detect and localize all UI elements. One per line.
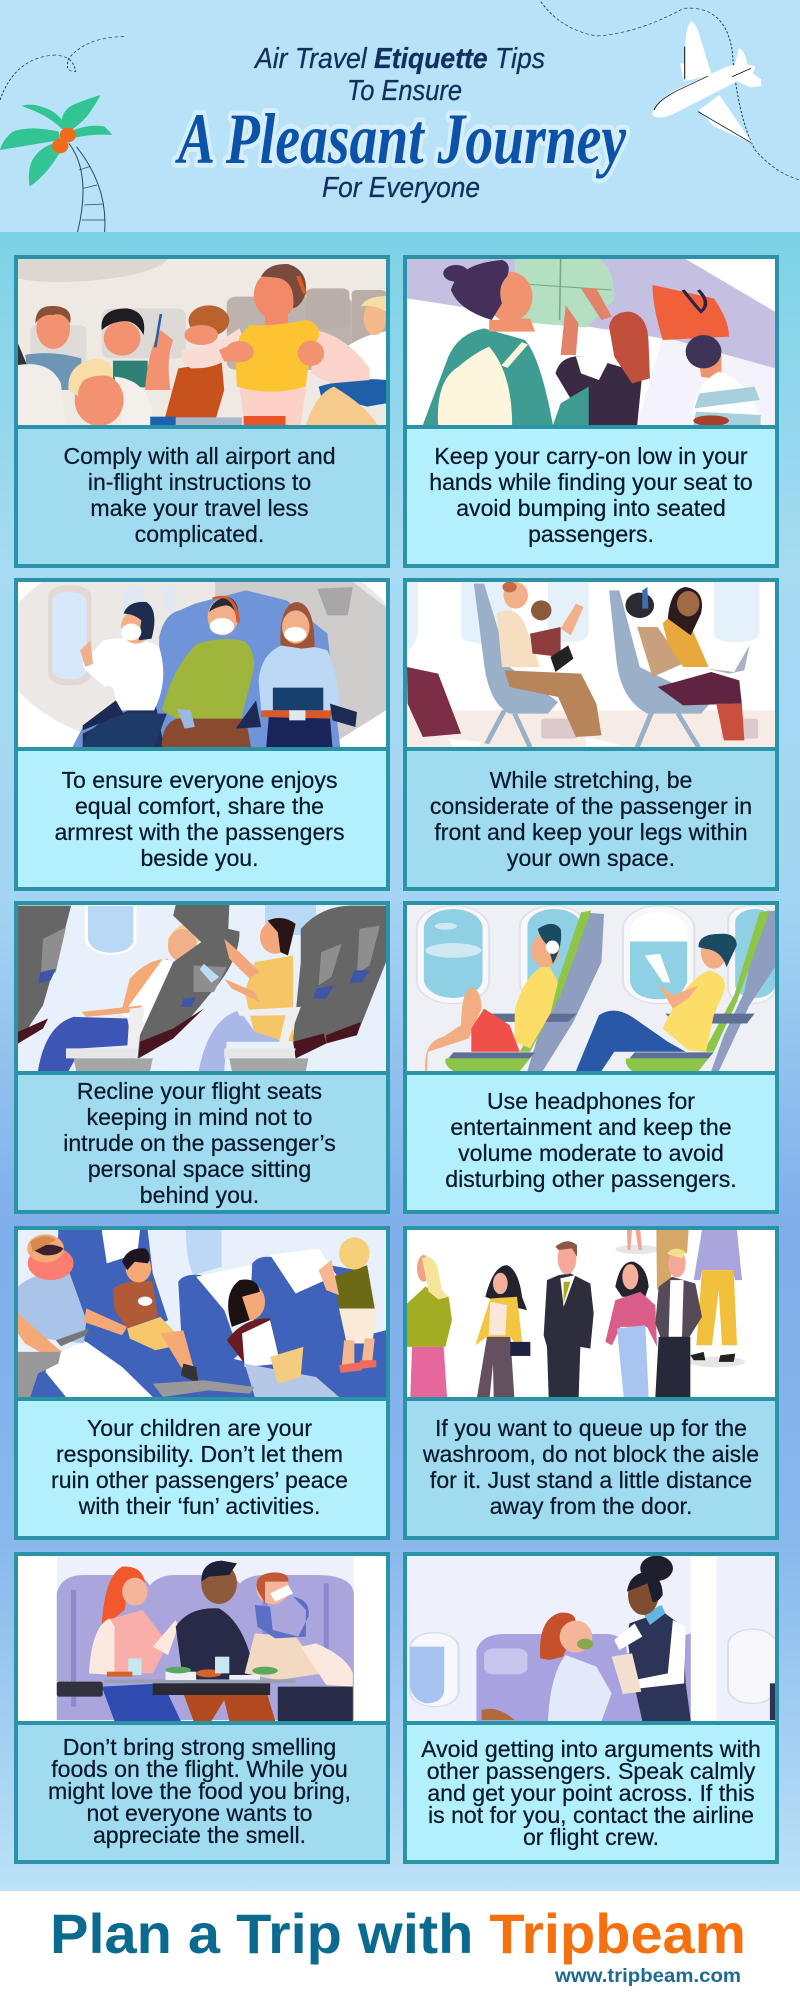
panel: headphones [403, 901, 779, 1214]
man in black suit [544, 1241, 594, 1397]
text: tip 2: passengers. [528, 521, 654, 547]
text: tip 10: other passengers. Speak calmly [427, 1758, 755, 1784]
overhead bag [653, 285, 729, 340]
text: tip 5: personal space sitting [88, 1156, 311, 1182]
panel: stretching [403, 578, 779, 891]
text: tip 10: or flight crew. [523, 1824, 659, 1850]
panel: strong foods [14, 1552, 390, 1864]
text: tip 5 [18, 1075, 386, 1210]
text: tip 4: front and keep your legs within [434, 819, 748, 845]
flight attendant [612, 1556, 691, 1721]
text: tip 8: for it. Just stand a little distance [430, 1467, 752, 1493]
woman with backpack [423, 260, 553, 425]
text: tip 8 [407, 1401, 775, 1536]
illustration: three masked passengers [18, 582, 386, 747]
seats [56, 1230, 386, 1397]
text: tip 9: foods on the flight. While you [51, 1756, 348, 1782]
woman with orange hair [89, 1567, 181, 1721]
text: tip 7: Your children are your [87, 1415, 312, 1441]
text: tip 7 [18, 1401, 386, 1536]
text: tip 9: not everyone wants to [87, 1800, 312, 1826]
passenger: woman with phone [101, 308, 173, 390]
text: tip 6: disturbing other passengers. [445, 1166, 737, 1192]
panel: children [14, 1226, 390, 1540]
woman with neck pillow [245, 1572, 353, 1721]
dashed flight path left [0, 37, 125, 100]
illustration: three passengers eating [18, 1556, 386, 1721]
passenger reading [576, 934, 737, 1071]
right seats [224, 906, 386, 1071]
text: tip 1: Comply with all airport and [63, 443, 336, 469]
title block [171, 43, 630, 204]
purple seat [476, 1633, 691, 1721]
text: tip 5: intrude on the passenger’s [63, 1130, 336, 1156]
woman with yellow jacket [475, 1265, 530, 1397]
text: tip 10 [407, 1725, 775, 1860]
illustration: flight attendant demonstrating life vest [18, 259, 386, 425]
text: tip 3: beside you. [140, 845, 259, 871]
icon: palm tree [0, 95, 112, 232]
seated woman [540, 1613, 612, 1721]
text: tip 7: responsibility. Don’t let them [56, 1441, 343, 1467]
text: tip 4: While stretching, be [490, 767, 692, 793]
man in striped shirt [686, 335, 762, 426]
footer text [50, 1902, 746, 1987]
text: tip 6 [407, 1075, 775, 1210]
text: tip 2 [407, 429, 775, 564]
background people [615, 1230, 745, 1367]
panel: arguments [403, 1552, 779, 1864]
woman with book [153, 1279, 339, 1397]
text: tip 4 [407, 751, 775, 887]
tray table and food [57, 1657, 296, 1697]
text: tip 2: hands while finding your seat to [429, 469, 753, 495]
reclined seat [66, 905, 240, 1071]
text: tip 9: Don’t bring strong smelling [63, 1734, 336, 1760]
right seat [609, 590, 711, 714]
text: tip 1 [18, 429, 386, 564]
woman with red hair [553, 288, 650, 425]
passenger with child [497, 582, 622, 747]
icon: airplane [652, 22, 761, 143]
panel: recline seats [14, 901, 390, 1214]
left seat [474, 584, 558, 714]
dashed flight path right [541, 2, 800, 180]
main title: A Pleasant Journey: A Pleasant Journey [175, 99, 627, 179]
windows [417, 906, 775, 1004]
text: tip 7: with their ‘fun’ activities. [79, 1493, 320, 1519]
man in white tank [38, 922, 201, 1071]
passenger: blond boy [68, 358, 153, 426]
text: tip 3: To ensure everyone enjoys [61, 767, 338, 793]
man in dark sweater [176, 1561, 275, 1721]
text: tip 10: is not for you, contact the airline [428, 1802, 754, 1828]
flight attendant with yellow vest [219, 264, 370, 425]
text: tip 3: armrest with the passengers [54, 819, 345, 845]
passenger: child with neck pillow [150, 305, 245, 425]
text: tip 5: Recline your flight seats [77, 1078, 322, 1104]
passenger by window [80, 602, 167, 747]
windows [410, 1629, 777, 1707]
toddler standing [319, 1237, 377, 1373]
text: tip 10: and get your point across. If this [427, 1780, 755, 1806]
passenger: man at right [285, 296, 386, 425]
text: tip 1: complicated. [135, 521, 264, 547]
woman in yellow [199, 918, 296, 1071]
panel: comply with instructions [14, 255, 390, 568]
title line: For Everyone: For Everyone [322, 172, 480, 204]
text: tip 8: away from the door. [490, 1493, 692, 1519]
website url: www.tripbeam.com [554, 1966, 741, 1987]
text: tip 3: equal comfort, share the [75, 793, 324, 819]
panel: carry-on low [403, 255, 779, 568]
panel: washroom queue [403, 1226, 779, 1540]
text: tip 7: ruin other passengers’ peace [51, 1467, 348, 1493]
left legs [407, 667, 461, 737]
illustration: family in blue seats [18, 1230, 386, 1397]
illustration: passengers with headphones and tablet [407, 905, 775, 1071]
text: tip 8: If you want to queue up for the [435, 1415, 747, 1441]
illustration: reclined seats in cabin [18, 905, 386, 1071]
illustration: seated passengers side view [407, 582, 775, 747]
header decorations: palm tree, plane, dashed flight paths [0, 2, 799, 232]
sleeping adult with eye mask [18, 1234, 153, 1397]
title line: To Ensure: To Ensure [347, 75, 462, 107]
text: tip 5: behind you. [140, 1182, 259, 1208]
right seat [626, 911, 775, 1071]
woman in pink top [605, 1262, 657, 1397]
text: tip 3 [18, 751, 386, 887]
text: tip 2: avoid bumping into seated [456, 495, 726, 521]
text: tip 9: might love the food you bring, [48, 1778, 351, 1804]
text: tip 1: make your travel less [90, 495, 309, 521]
text: tip 4: considerate of the passenger in [430, 793, 752, 819]
passenger with laptop [625, 587, 749, 740]
text: tip 6: Use headphones for [487, 1088, 695, 1114]
passenger: man in blue shirt [25, 306, 81, 390]
header band [0, 0, 800, 232]
text: tip 2: Keep your carry-on low in your [434, 443, 748, 469]
text: tip 6: entertainment and keep the [450, 1114, 732, 1140]
title line: Air Travel Etiquette Tips: Air Travel Etiquette Tips [253, 43, 545, 75]
text: tip 5: keeping in mind not to [87, 1104, 312, 1130]
passenger with book [259, 602, 340, 747]
text: tip 4: your own space. [507, 845, 675, 871]
left seat [445, 911, 604, 1071]
illustration: passenger with flight attendant [407, 1556, 775, 1721]
text: tip 6: volume moderate to avoid [458, 1140, 724, 1166]
call to action: Plan a Trip with Tripbeam: Plan a Trip with Tripbeam [50, 1902, 746, 1965]
text: tip 8: washroom, do not block the aisle [423, 1441, 759, 1467]
footer band [0, 1891, 800, 2000]
panel: share the armrest [14, 578, 390, 891]
blue seats [73, 590, 340, 747]
passenger with headphones [425, 924, 561, 1071]
text: tip 1: in-flight instructions to [88, 469, 311, 495]
text: tip 10: Avoid getting into arguments with [421, 1736, 761, 1762]
woman from behind [407, 1255, 452, 1397]
man in gray blazer [655, 1249, 702, 1397]
text: tip 9: appreciate the smell. [93, 1822, 306, 1848]
text: tip 9 [18, 1725, 386, 1860]
illustration: people queuing [407, 1230, 775, 1397]
boy with phone [113, 1248, 199, 1384]
illustration: passengers in aisle with overhead bins [407, 259, 775, 425]
left seats [18, 906, 71, 1043]
passenger in green sweater [162, 597, 254, 747]
